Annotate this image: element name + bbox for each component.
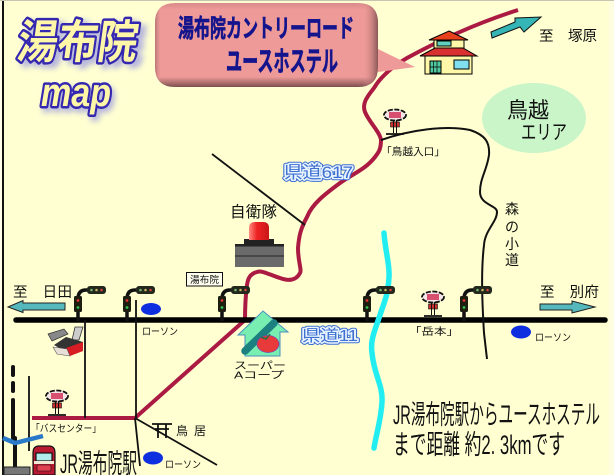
label: to Tsukahara: 至 塚原: [539, 28, 597, 45]
road: main road: [16, 317, 605, 323]
icon: bus stop Torigoe entrance: [384, 110, 406, 134]
label: Lawson south: ローソン: [165, 460, 201, 471]
label: Lawson east: ローソン: [535, 333, 571, 344]
label: A-Coop supermarket: スーパー: [234, 360, 286, 372]
label: Takemoto: 「岳本」: [409, 325, 459, 338]
area: Torigoe: 鳥越: [507, 98, 549, 123]
icon: train: [33, 446, 55, 475]
label: A-Coop supermarket: Aコープ: [234, 370, 284, 382]
area: Torigoe: エリア: [521, 122, 567, 144]
icon: station bridge: [3, 436, 43, 443]
marker: Lawson south: [143, 452, 163, 464]
marker: Lawson north: [141, 303, 161, 315]
road: side streets: [29, 128, 497, 466]
arrow: to Beppu: [540, 301, 595, 313]
label: to Beppu: 至 別府: [540, 284, 599, 301]
icon: station building: [4, 467, 30, 475]
label: forest road: 道: [505, 252, 519, 268]
label: route 11: 県道11: [302, 327, 358, 345]
label: to Hita: 至 日田: [13, 285, 72, 301]
title: 湯布院 map: 湯布院: [20, 20, 147, 72]
label: Torigoe entrance: 「鳥越入口」: [381, 145, 445, 158]
label: A-Coop supermarket: [234, 360, 286, 382]
icon: post office / mail: [48, 327, 83, 356]
label: forest road: [505, 201, 519, 268]
arrow: to Hita: [8, 300, 65, 312]
callout: youth hostel name: [155, 3, 415, 87]
area: Torigoe: [482, 83, 586, 153]
icon: SDF base with red lamp: [235, 222, 284, 267]
label: route 617: 県道617: [284, 163, 353, 182]
road: prefectural road 617 and 11 (red route): [32, 10, 518, 418]
callout: youth hostel name: 湯布院カントリーロード: [178, 15, 354, 43]
label: Self-Defense Force: 自衛隊: [230, 203, 277, 221]
marker: Lawson east: [511, 326, 531, 338]
callout: youth hostel name: ユースホステル: [226, 46, 338, 77]
label: forest road: の: [505, 219, 519, 235]
title: 湯布院 map: map: [41, 71, 111, 115]
railway line: [13, 367, 15, 467]
traffic signals: [74, 286, 492, 321]
icon: bus stop bus center: [46, 390, 68, 415]
label: Yufuin sign: [186, 272, 222, 286]
label: route 11: 県道11: [302, 327, 358, 345]
label: route 11: 県道11: [302, 327, 358, 345]
label: forest road: 森: [505, 201, 519, 217]
river: [372, 233, 389, 448]
icon: A-Coop supermarket: [238, 311, 288, 356]
icon: bus stop Takemoto: [422, 292, 444, 316]
text: distance note: [393, 400, 600, 460]
label: Yufuin sign: 湯布院: [190, 274, 219, 286]
title: 湯布院 map: 湯布院: [14, 16, 142, 68]
label: bus center: 「バスセンター」: [31, 423, 101, 435]
label: route 617: 県道617: [284, 163, 353, 182]
icon: torii gate: [152, 424, 172, 438]
label: forest road: 小: [505, 236, 519, 252]
title: 湯布院 map: map: [44, 75, 114, 119]
label: Lawson north: ローソン: [142, 327, 178, 338]
label: torii: 鳥居: [176, 423, 206, 438]
title: 湯布院 map: [14, 16, 147, 119]
label: route 617: 県道617: [284, 163, 353, 182]
icon: youth hostel house: [420, 31, 477, 74]
arrow: to Tsukahara: [491, 17, 541, 38]
